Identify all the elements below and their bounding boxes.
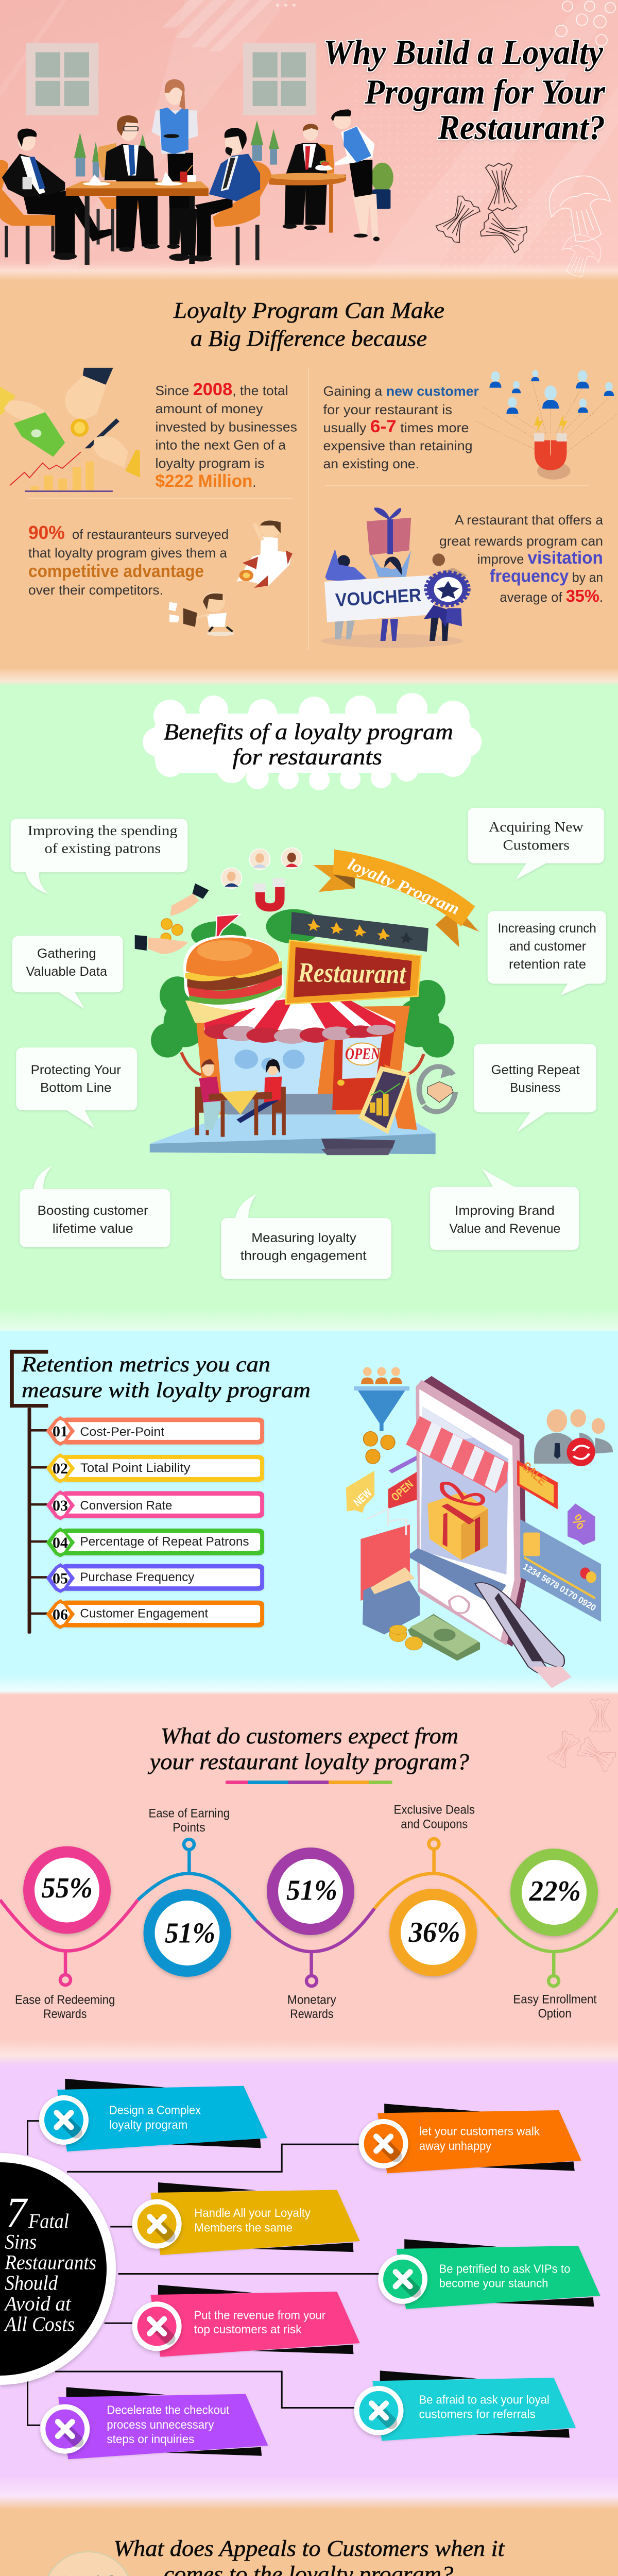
panel: customer expectations: [0, 1699, 618, 2021]
decorative pasta: [546, 1699, 618, 1773]
text: visitation frequency: great rewards program can: [439, 533, 603, 549]
seated man in blue jacket: [169, 128, 260, 261]
text: visitation frequency: frequency by an: [490, 567, 603, 586]
bubble: protecting bottom line: Bottom Line: [40, 1081, 111, 1095]
text: referrals: Be afraid to ask your loyal: [419, 2393, 550, 2406]
peppercorn sketches: [556, 1, 615, 46]
bubble: improving spending: of existing patrons: [44, 841, 161, 856]
metric pills: [46, 1416, 264, 1629]
trees: [151, 909, 454, 1058]
metric numbers: [53, 1423, 68, 1623]
text: revenue at risk: top customers at risk: [194, 2323, 302, 2336]
text: visitation frequency: [439, 512, 604, 605]
metric numbers: 06: [53, 1606, 68, 1623]
panel: benefits: [11, 693, 606, 1279]
window right: [243, 43, 316, 115]
text: since 2008: [156, 380, 297, 491]
label: ease of redeeming: Ease of Redeeming: [15, 1993, 115, 2007]
text: revenue at risk: [194, 2308, 325, 2336]
bubble: acquiring new customers: Acquiring New: [489, 819, 583, 835]
left chair: [0, 160, 59, 264]
text: 90 percent: 90% of restauranteurs surveyed: [28, 522, 229, 543]
label: ease of earning: Ease of Earning: [148, 1806, 230, 1820]
hero illustration: restaurant scene: [0, 0, 618, 282]
bubble: improving spending: [28, 823, 178, 856]
text: complex program: Design a Complex: [109, 2103, 201, 2116]
colour underline: [226, 1781, 392, 1784]
handshake icon: [419, 1066, 453, 1104]
cash: [408, 1614, 480, 1660]
middle chair: [96, 143, 146, 251]
icon: x mark orange: [359, 2119, 408, 2168]
metric numbers: 01: [53, 1423, 68, 1440]
text: petrified vips: Be petrified to ask VIPs to: [439, 2262, 570, 2276]
text: 90 percent: competitive advantage: [28, 562, 204, 581]
seated man with glasses: [105, 115, 160, 252]
icon: voucher group with gift: [321, 507, 468, 648]
illustration: mobile shop: [346, 1367, 613, 1688]
bubble: lifetime value: lifetime value: [53, 1222, 133, 1236]
label: ease of earning: Points: [173, 1821, 205, 1835]
metric labels: Conversion Rate: [80, 1499, 172, 1513]
icon: x mark green: [378, 2255, 427, 2304]
text: since 2008: into the next Gen of a: [156, 437, 286, 453]
new bubble: [346, 1471, 374, 1513]
text: 90 percent: over their competitors.: [28, 582, 163, 598]
text: walk away unhappy: let your customers walk: [419, 2125, 540, 2138]
black circle: [0, 2153, 116, 2385]
panel: big difference: [0, 298, 617, 650]
text: revenue at risk: Put the revenue from your: [194, 2308, 325, 2321]
stat: 22 percent: 22%: [529, 1875, 581, 1907]
heading: 7 fatal sins: Avoid at: [3, 2292, 72, 2315]
window left: [26, 43, 98, 115]
heading: retention metrics: [21, 1353, 311, 1402]
text: visitation frequency: A restaurant that offers a: [455, 512, 604, 528]
plants: [74, 120, 279, 177]
stat: 55 percent: 55%: [41, 1872, 93, 1904]
bubble: measuring loyalty: through engagement: [241, 1249, 367, 1263]
label: exclusive deals: [393, 1803, 475, 1831]
text: walk away unhappy: away unhappy: [419, 2139, 491, 2153]
label: exclusive deals: Exclusive Deals: [393, 1803, 475, 1817]
heading: customer expectations: your restaurant loyalty program?: [148, 1749, 469, 1774]
stat: 51 percent monetary: 51%: [286, 1875, 337, 1907]
text: visitation frequency: average of 35%.: [500, 586, 603, 605]
back table and diner: [267, 124, 346, 233]
metric labels: [80, 1425, 249, 1620]
heading: customer expectations: What do customers expect from: [161, 1723, 458, 1749]
bubble: acquiring new customers: Customers: [503, 837, 570, 853]
text: 90 percent: that loyalty program gives them a: [28, 545, 228, 561]
wave end rings: [60, 1839, 559, 1986]
main table: [66, 165, 209, 265]
metric labels: Percentage of Repeat Patrons: [80, 1535, 249, 1549]
heading: appeals: [113, 2536, 505, 2576]
text: referrals: [419, 2393, 550, 2420]
bubble: measuring loyalty: [241, 1231, 367, 1263]
pavement: [150, 1113, 436, 1154]
menu dots: [276, 4, 296, 7]
restaurant sign: [286, 940, 421, 1004]
heading: 7 fatal sins: Sins: [5, 2230, 37, 2253]
heading: retention metrics: Retention metrics you can: [21, 1353, 270, 1377]
awning on phone: [406, 1416, 508, 1493]
text: loyalty program ribbon: loyalty Program: [345, 854, 462, 918]
awning: [204, 998, 396, 1030]
bubble: brand value: [449, 1204, 560, 1236]
bubble: repeat business: Business: [510, 1081, 560, 1095]
chalkboard: [384, 1064, 417, 1130]
connectors: [28, 2121, 379, 2425]
speech bubbles: [11, 808, 606, 1279]
sale sign: [517, 1460, 558, 1510]
panel: retention metrics: [10, 1350, 613, 1688]
loyalty ribbon: [313, 865, 355, 892]
text: since 2008: $222 Million.: [156, 471, 256, 491]
coins: [364, 1432, 395, 1464]
stat: 36 percent: 36%: [408, 1917, 460, 1948]
heading: appeals: What does Appeals to Customers when it: [113, 2536, 505, 2561]
text: open sign: OPEN: [345, 1044, 381, 1063]
mushroom sketches: [543, 170, 618, 282]
heading: benefits: for restaurants: [233, 744, 382, 770]
text: new customer: an existing one.: [323, 456, 419, 471]
text: since 2008: loyalty program is: [156, 455, 265, 471]
heading: 7 fatal sins: Restaurants: [4, 2250, 96, 2274]
text: checkout: process unnecessary: [107, 2418, 214, 2431]
panel: fatal sins: [0, 2079, 600, 2459]
text: checkout: Decelerate the checkout: [107, 2403, 230, 2417]
people icon: [534, 1409, 613, 1466]
bubble: repeat business: Getting Repeat: [491, 1063, 580, 1077]
metric labels: Customer Engagement: [80, 1606, 208, 1620]
magnet and avatars: [260, 885, 280, 907]
stat: 51 percent earning: [143, 1889, 231, 1977]
title: Why Build a Loyalty: [323, 32, 604, 72]
text: new customer: for your restaurant is: [323, 402, 452, 417]
heading: 7 fatal sins: Fatal: [28, 2209, 69, 2232]
bubble: increasing crunch: and customer: [509, 939, 586, 954]
label: monetary rewards: [287, 1993, 336, 2021]
stat: 36 percent: [389, 1889, 477, 1976]
icon: x mark blue: [39, 2095, 89, 2145]
label: ease of redeeming: Rewards: [43, 2007, 87, 2021]
text: percent: %: [568, 1511, 590, 1533]
icon: rocket businessman and falling competitor: [169, 520, 293, 636]
text: open sign phone: OPEN: [389, 1478, 416, 1504]
text: complex program: loyalty program: [109, 2118, 187, 2131]
bubble: measuring loyalty: Measuring loyalty: [251, 1231, 356, 1245]
label: easy enrollment: Option: [538, 2007, 572, 2021]
metric numbers: 03: [53, 1497, 68, 1514]
funnel: [354, 1367, 409, 1431]
text: visitation frequency: improve visitation: [477, 548, 603, 568]
icon: money hands and growth chart: [0, 368, 140, 492]
heading: customer expectations: [148, 1723, 469, 1774]
stat: 51 percent earning: 51%: [165, 1917, 215, 1949]
counter: [407, 1548, 506, 1605]
cloud heading background: [143, 693, 482, 790]
text: same handling: Members the same: [194, 2221, 293, 2234]
bubble: lifetime value: [38, 1204, 148, 1236]
metric labels: Purchase Frequency: [80, 1570, 194, 1584]
percent bubble: [568, 1503, 595, 1545]
icon: x mark pink: [132, 2301, 182, 2351]
sin card shapes: [57, 2079, 600, 2459]
bubble: acquiring new customers: [489, 819, 583, 853]
bubble: increasing crunch: [498, 921, 596, 972]
bubble: brand value: Value and Revenue: [449, 1222, 560, 1236]
label: easy enrollment: [513, 1993, 597, 2021]
dividers: [28, 368, 589, 650]
pasta bows: [434, 162, 529, 254]
heading: 7 fatal sins: Should: [5, 2271, 58, 2294]
star rating bar: [291, 912, 428, 952]
hero diagonal light bands: [0, 0, 618, 268]
metric numbers: 04: [53, 1534, 68, 1551]
text: restaurant sign: Restaurant: [297, 957, 407, 990]
heading: 7 fatal sins: All Costs: [3, 2312, 75, 2335]
title: [323, 32, 606, 147]
metric numbers: 02: [53, 1460, 68, 1477]
heading: 7 fatal sins: 7: [6, 2189, 28, 2237]
cactus: [371, 163, 393, 209]
illustration: restaurant storefront: [135, 848, 479, 1155]
door: [332, 1031, 394, 1110]
icon: x mark teal: [354, 2386, 404, 2435]
text: petrified vips: [439, 2262, 570, 2290]
stat: 55 percent: [23, 1846, 111, 1934]
bubble: increasing crunch: retention rate: [509, 957, 586, 972]
waitress with notepad: [152, 79, 198, 249]
label: easy enrollment: Easy Enrollment: [513, 1993, 597, 2006]
left diner in black suit: [2, 129, 112, 260]
bubble: gathering valuable data: Gathering: [37, 946, 96, 961]
heading bracket: [10, 1350, 48, 1634]
text: new customer: Gaining a new customer: [323, 383, 479, 399]
serving waitress: [315, 109, 380, 241]
text: walk away unhappy: [419, 2125, 540, 2153]
heading: benefits: [164, 719, 453, 770]
text: 90 percent: [28, 522, 229, 598]
bubble: protecting bottom line: Protecting Your: [31, 1063, 121, 1077]
text: card number: 1234 5678 0170 0920: [521, 1562, 598, 1613]
text: new customer: [323, 383, 479, 471]
text: since 2008: Since 2008, the total: [156, 380, 288, 399]
gift: [427, 1492, 488, 1560]
label: monetary rewards: Monetary: [287, 1993, 336, 2007]
open sign: [390, 1456, 420, 1472]
icon: x mark yellow: [132, 2199, 182, 2249]
text: since 2008: amount of money: [156, 401, 263, 416]
text: checkout: [107, 2403, 230, 2446]
bubble: lifetime value: Boosting customer: [38, 1204, 148, 1218]
diners at table: [195, 1087, 209, 1135]
heading: 7 fatal sins: [3, 2189, 96, 2335]
metric numbers: 05: [53, 1570, 68, 1587]
text: new sign: NEW: [351, 1486, 374, 1509]
text: same handling: Handle All your Loyalty: [194, 2206, 311, 2219]
credit card: [520, 1519, 601, 1622]
building: [195, 1006, 410, 1114]
text: petrified vips: become your staunch: [439, 2277, 548, 2290]
hero top stripes: [162, 0, 272, 52]
bubble: repeat business: [491, 1063, 580, 1095]
label: ease of earning: [148, 1806, 230, 1835]
bubble: protecting bottom line: [31, 1063, 121, 1095]
special offer megaphone: [0, 2552, 132, 2576]
text: complex program: [109, 2103, 201, 2131]
bubble: increasing crunch: Increasing crunch: [498, 921, 596, 936]
label: ease of redeeming: [15, 1993, 115, 2021]
bags: [360, 1524, 410, 1601]
heading: big difference: [173, 298, 444, 351]
stat: 22 percent: [510, 1849, 598, 1936]
text: sale sign: SALE: [519, 1459, 550, 1488]
label: monetary rewards: Rewards: [290, 2007, 334, 2021]
heading: retention metrics: measure with loyalty program: [22, 1379, 311, 1402]
title: Program for Your: [364, 72, 606, 111]
metric labels: Cost-Per-Point: [80, 1425, 165, 1439]
icon: magnet attracting people: [475, 370, 617, 480]
phone: [416, 1376, 526, 1647]
text: new customer: expensive than retaining: [323, 438, 473, 453]
text: checkout: steps or inquiries: [107, 2432, 194, 2446]
icon: x mark purple: [40, 2404, 90, 2454]
title: Restaurant?: [437, 108, 605, 147]
text: voucher: VOUCHER: [335, 584, 422, 611]
stat: 51 percent monetary: [267, 1848, 354, 1935]
heading: big difference: Loyalty Program Can Make: [173, 298, 444, 323]
text: since 2008: invested by businesses: [156, 419, 297, 435]
text: referrals: customers for referrals: [419, 2407, 536, 2420]
heading: benefits: Benefits of a loyalty program: [164, 719, 453, 744]
label: exclusive deals: and Coupons: [401, 1818, 468, 1831]
bubble: gathering valuable data: Valuable Data: [26, 964, 107, 979]
bubble: improving spending: Improving the spending: [28, 823, 178, 838]
bubble: brand value: Improving Brand: [455, 1204, 555, 1218]
wave timeline: [0, 1851, 618, 1975]
coins and hands: [192, 883, 209, 899]
bubble: gathering valuable data: [26, 946, 107, 979]
right chair: [213, 161, 271, 265]
panel: appeals to customers: [0, 2536, 600, 2576]
metric labels: Total Point Liability: [80, 1461, 191, 1475]
heading: big difference: a Big Difference because: [191, 326, 427, 351]
text: same handling: [194, 2206, 311, 2234]
escalator: [475, 1583, 564, 1674]
text: new customer: usually 6-7 times more: [323, 417, 469, 436]
burger: [183, 935, 285, 1010]
